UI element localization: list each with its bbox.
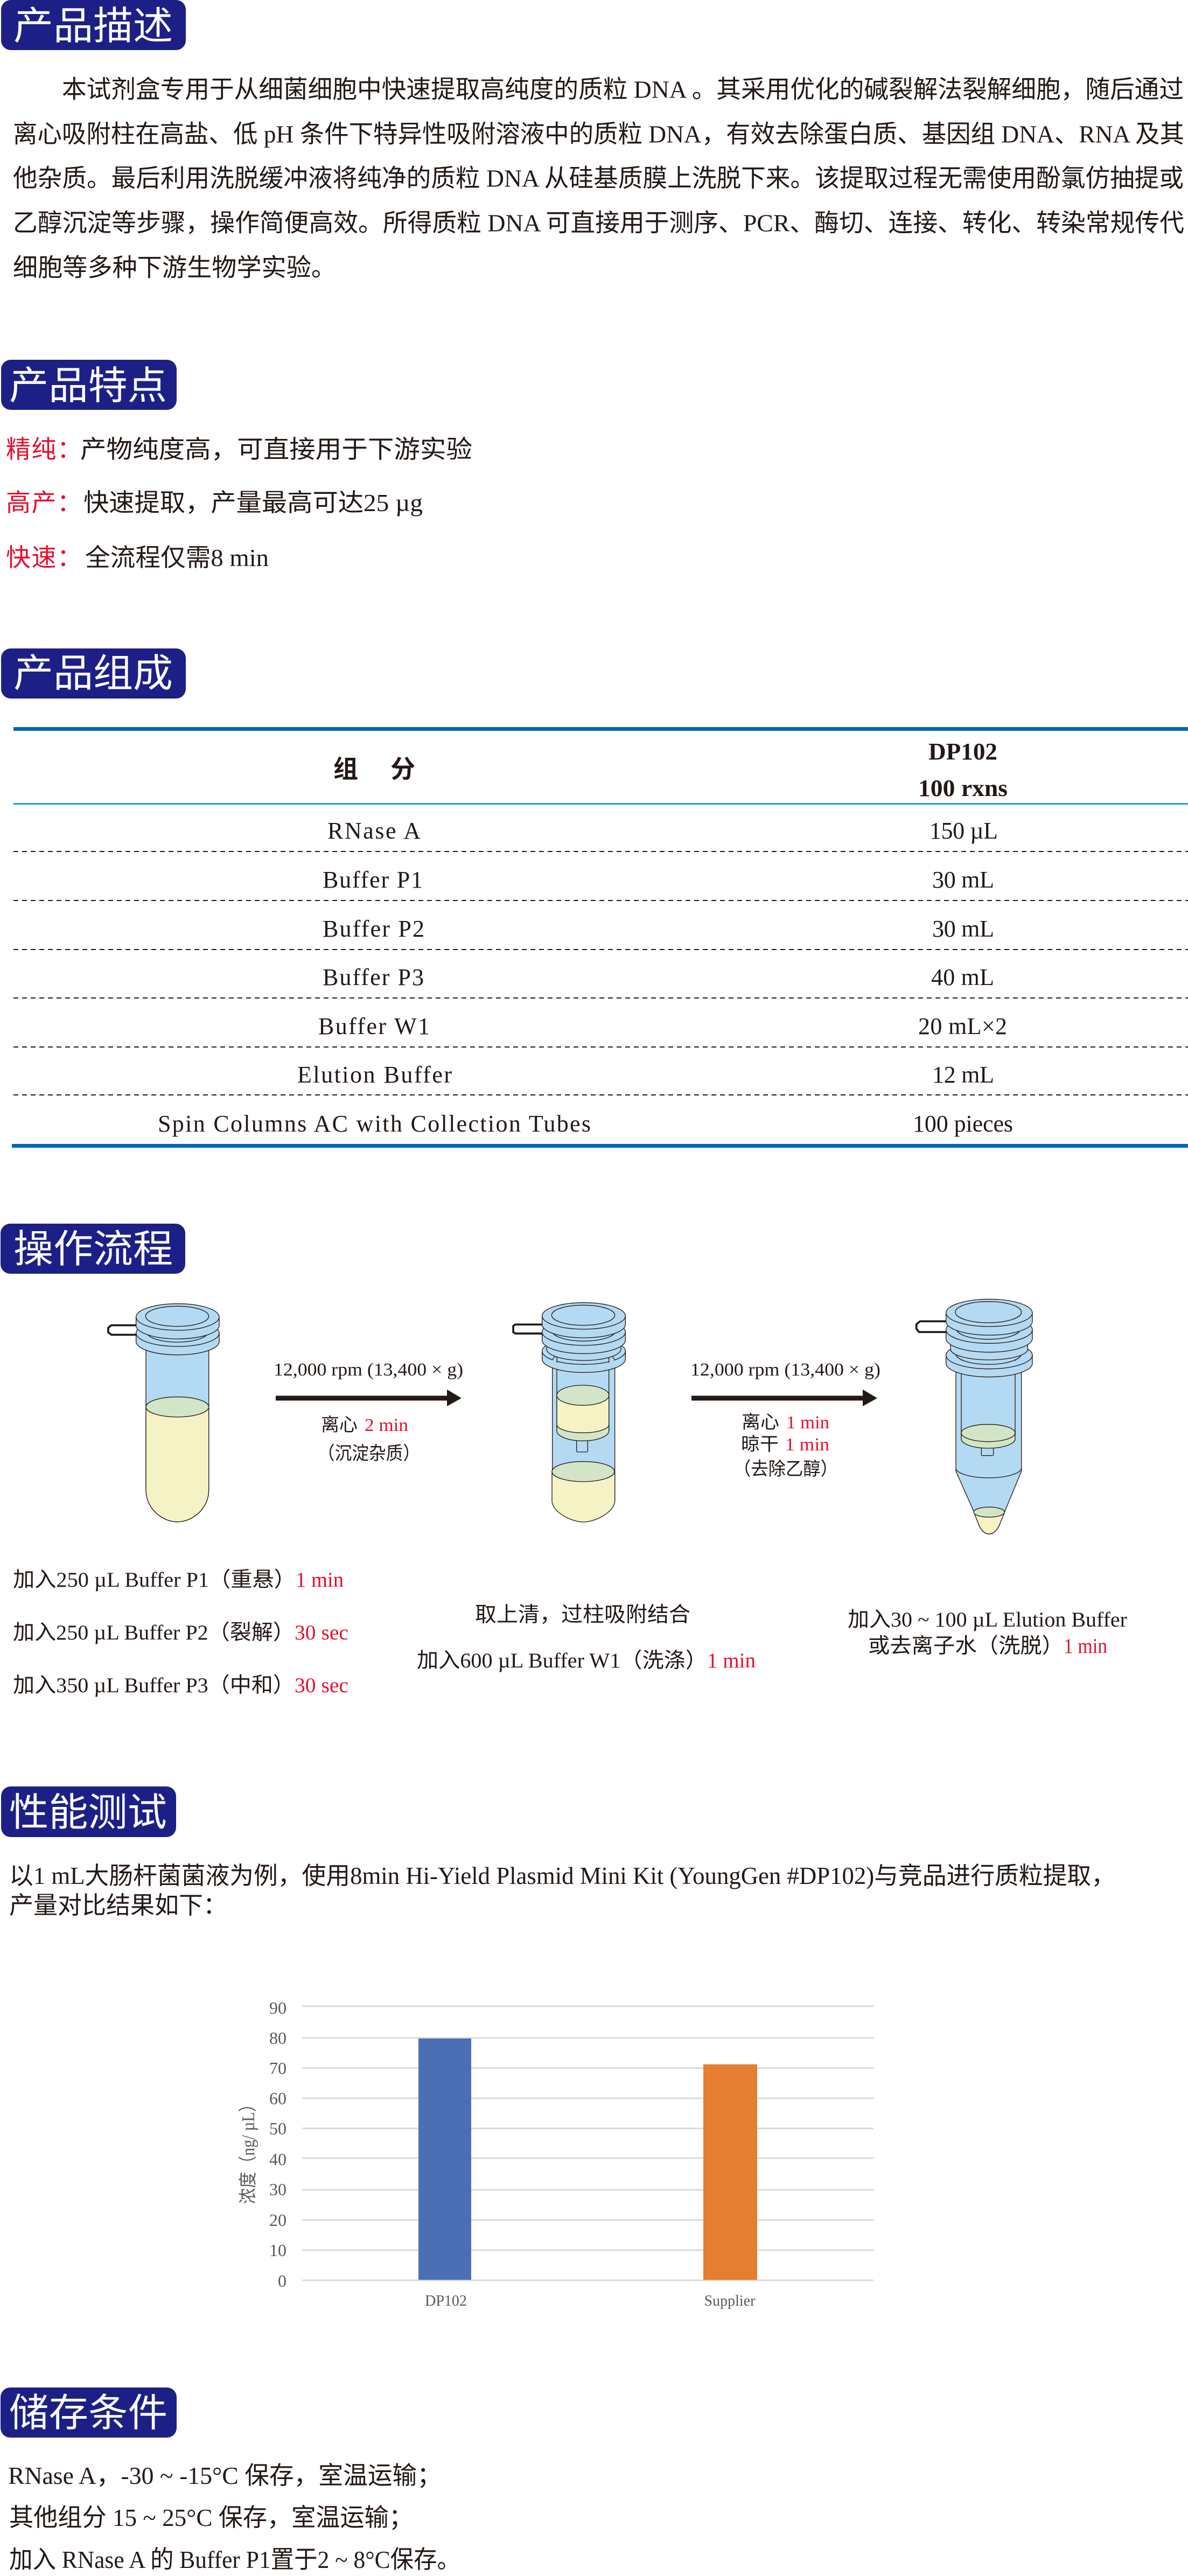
text block: storage lines: 加入 RNase A 的 Buffer P1置于2 ~ 8°C保存。 [9,2546,460,2573]
text block: step three instructions: 1 min [1064,1635,1107,1658]
x axis categories: Supplier [704,2293,756,2309]
bar chart: concentration comparison [238,1998,873,2309]
heading: performance test: 性能测试 [9,1781,167,1837]
feature: speed: 全流程仅需8 min [85,544,269,571]
table: components [12,727,1188,1148]
arrow: second centrifuge step [690,1360,880,1479]
y axis ticks: 70 [269,2058,286,2078]
y axis title: 浓度（ng/ µL） [238,2096,258,2204]
feature: purity: 精纯： [6,436,82,463]
text block: step two instructions [417,1603,756,1672]
table header: 100 rxns [918,775,1008,801]
table header: DP102 [928,738,997,765]
text block: step two instructions: 取上清，过柱吸附结合 [475,1603,690,1626]
arrow: second centrifuge step: （去除乙醇） [733,1459,838,1479]
feature: yield: 高产： [6,489,82,516]
table rows: Spin Columns AC with Collection Tubes [158,1111,591,1137]
text block: description paragraph [13,75,1184,281]
panel: product description [1,0,1184,281]
text block: description paragraph: 他杂质。最后利用洗脱缓冲液将纯净的质粒 DNA 从硅基质膜上洗脱下来。该提取过程无需使用酚氯仿抽提或 [13,165,1184,192]
text block: step one instructions: 30 sec [295,1674,348,1697]
y axis ticks: 0 [278,2271,286,2291]
bar: Supplier [703,2064,757,2280]
y axis ticks: 30 [269,2180,286,2199]
y axis ticks: 60 [269,2089,286,2108]
text block: step one instructions [13,1568,348,1697]
feature: yield: 快速提取，产量最高可达25 µg [83,489,423,516]
text block: test introduction: 产量对比结果如下： [9,1892,227,1919]
text block: step three instructions: 加入30 ~ 100 µL Elution Buffer [848,1608,1127,1631]
arrow: first centrifuge step: 12,000 rpm (13,400 × g) [274,1360,463,1380]
text block: description paragraph: 本试剂盒专用于从细菌细胞中快速提取高纯度的质粒 DNA 。其采用优化的碱裂解法裂解细胞，随后通过 [62,75,1184,103]
text block: storage lines: RNase A，-30 ~ -15°C 保存，室温运输； [8,2462,442,2489]
text block: storage lines: 其他组分 15 ~ 25°C 保存，室温运输； [9,2504,413,2531]
table rows: Elution Buffer [297,1062,452,1088]
feature: speed: 快速： [6,544,82,571]
table rows: RNase A [327,818,421,844]
table rows: 12 mL [932,1062,994,1088]
arrow: second centrifuge step: 1 min [786,1413,829,1433]
table rows: 150 µL [930,818,998,844]
table rows: Buffer W1 [318,1013,430,1039]
x axis categories [425,2293,756,2309]
text block: step one instructions: 1 min [296,1568,344,1591]
arrow: second centrifuge step: 离心 [742,1412,779,1433]
text block: step one instructions: 加入350 µL Buffer P3（中和） [13,1674,295,1697]
arrow: second centrifuge step: 12,000 rpm (13,400 × g) [690,1360,880,1380]
y axis ticks: 80 [269,2028,286,2048]
text block: step one instructions: 加入250 µL Buffer P1（重悬） [13,1568,296,1591]
heading: operating procedure: 操作流程 [13,1217,173,1274]
y axis ticks [269,1998,286,2291]
panel: product composition [1,641,1188,1148]
table header: 组 [333,756,358,783]
text block: description paragraph: 离心吸附柱在高盐、低 pH 条件下特异性吸附溶液中的质粒 DNA，有效去除蛋白质、基因组 DNA、RNA 及其 [13,121,1184,148]
arrow: first centrifuge step [274,1360,463,1464]
table header: 分 [390,756,415,783]
table rows [158,818,1013,1137]
x axis categories: DP102 [425,2293,467,2309]
table header [333,738,1008,801]
table rows: 100 pieces [913,1111,1013,1137]
feature: speed [6,544,269,571]
text block: step three instructions [848,1608,1127,1658]
icon: spin column in collection tube [513,1303,625,1522]
bar: DP102 [418,2039,471,2280]
panel: storage conditions [1,2381,460,2573]
arrow: second centrifuge step: 晾干 [741,1434,779,1455]
panel: product features [1,354,472,571]
arrow: first centrifuge step: 2 min [365,1415,408,1435]
table rows: 30 mL [932,867,994,893]
y axis ticks: 50 [269,2119,286,2138]
text block: description paragraph: 乙醇沉淀等步骤，操作简便高效。所得质粒 DNA 可直接用于测序、PCR、酶切、连接、转化、转染常规传代 [13,209,1184,237]
text block: step one instructions: 30 sec [295,1621,348,1644]
text block: test introduction [9,1862,1115,1919]
panel: performance test [1,1781,1115,2309]
text block: step one instructions: 加入250 µL Buffer P2（裂解） [13,1621,295,1644]
table rows: Buffer P3 [323,964,424,990]
icon: lysate tube [108,1304,219,1522]
text block: description paragraph: 细胞等多种下游生物学实验。 [13,254,336,281]
y axis ticks: 90 [269,1998,286,2017]
arrow: second centrifuge step: 1 min [785,1435,829,1455]
text block: test introduction: 以1 mL大肠杆菌菌液为例，使用8min Hi-Yield Plasmid Mini Kit (YoungGen #DP102)与竞品进行质粒提取， [9,1862,1115,1889]
heading: storage conditions: 储存条件 [9,2381,167,2438]
table rows: 30 mL [932,916,994,942]
text block: step three instructions: 或去离子水（洗脱） [868,1635,1064,1658]
heading: product features: 产品特点 [9,354,167,410]
table rows: 40 mL [931,964,994,990]
y axis ticks: 40 [269,2149,286,2169]
panel: operating procedure [1,1217,1127,1697]
table rows: Buffer P1 [323,867,423,893]
y axis ticks: 20 [269,2210,286,2230]
feature: purity: 产物纯度高，可直接用于下游实验 [80,436,472,463]
text block: step two instructions: 加入600 µL Buffer W1（洗涤） [417,1649,707,1672]
arrow: first centrifuge step: 离心 [321,1415,358,1435]
arrow: first centrifuge step: （沉淀杂质） [318,1443,420,1464]
icon: eluting spin column with conical tube [917,1299,1032,1534]
text block: step two instructions: 1 min [707,1649,756,1672]
y axis ticks: 10 [269,2240,286,2260]
heading: product composition: 产品组成 [13,641,173,698]
text block: storage lines [8,2462,460,2573]
table rows: 20 mL×2 [918,1013,1007,1039]
table rows: Buffer P2 [323,916,424,942]
